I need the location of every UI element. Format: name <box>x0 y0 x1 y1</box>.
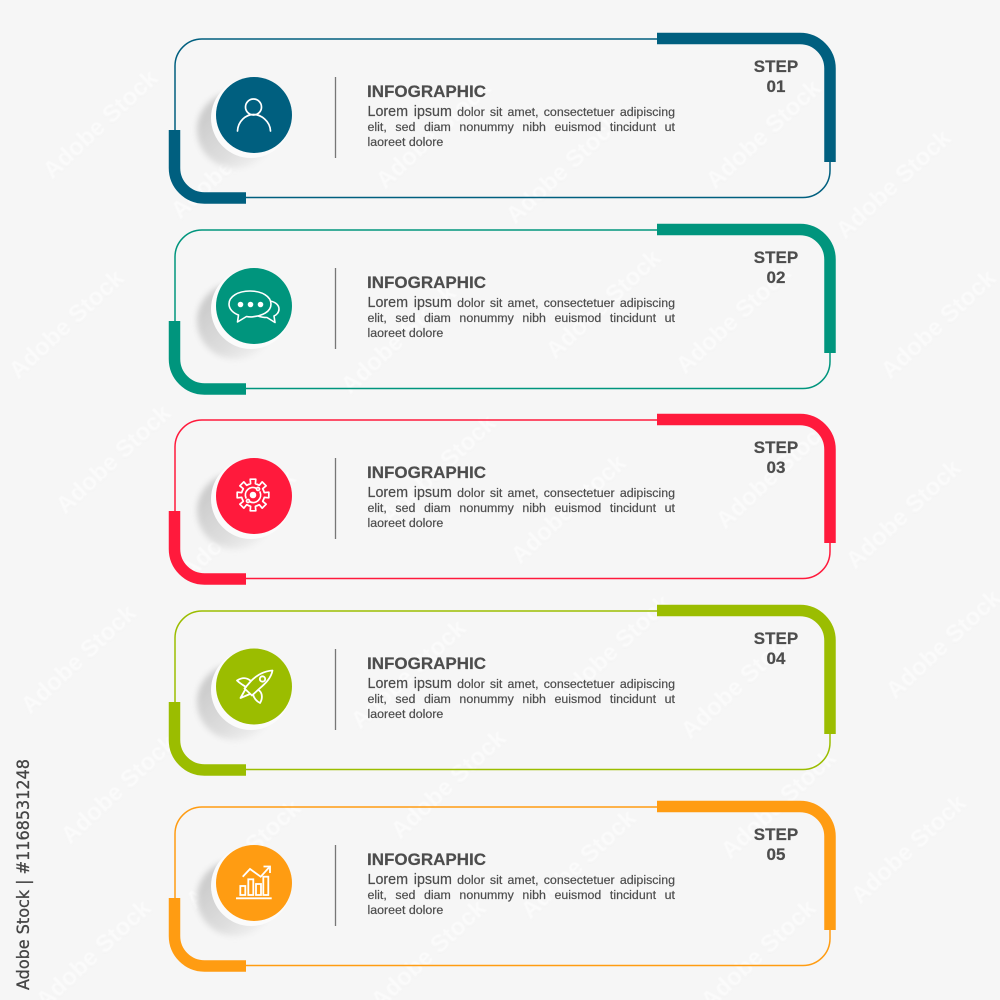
text: Adobe Stock <box>701 74 827 194</box>
text: Adobe Stock <box>181 794 307 914</box>
body text: Lorem ipsum dolor sit amet, consectetuer adipiscing <box>368 676 675 692</box>
body text: Lorem ipsum dolor sit amet, consectetuer adipiscing <box>368 872 675 888</box>
panel: step 03 <box>168 414 836 585</box>
panel: step 01 <box>168 32 836 910</box>
text: Adobe Stock <box>506 449 632 569</box>
text: Adobe Stock <box>376 409 502 529</box>
text: Adobe Stock <box>336 279 462 399</box>
panel: step 05 <box>168 800 836 972</box>
step label <box>754 629 798 668</box>
text: Adobe Stock <box>841 454 967 574</box>
panel: step 04 <box>168 604 836 776</box>
text: Adobe Stock <box>676 624 802 744</box>
step label: 04 <box>767 649 785 668</box>
text: Adobe Stock <box>846 789 972 909</box>
step label: 01 <box>767 77 785 96</box>
body text: elit, sed diam nonummy nibh euismod tincidunt ut <box>368 120 675 134</box>
text: Adobe Stock <box>386 724 512 844</box>
text: Adobe Stock <box>876 264 1000 384</box>
text: Adobe Stock <box>541 244 667 364</box>
body text <box>368 295 675 340</box>
heading: INFOGRAPHIC <box>367 850 486 869</box>
body text: laoreet dolore <box>368 326 443 340</box>
body text: laoreet dolore <box>368 135 443 149</box>
body text: laoreet dolore <box>368 903 443 917</box>
text: Adobe Stock <box>711 414 837 534</box>
body text: elit, sed diam nonummy nibh euismod tincidunt ut <box>368 692 675 706</box>
panel: step 02 <box>168 224 836 395</box>
text: Adobe Stock <box>516 804 642 924</box>
step label <box>754 248 798 287</box>
heading: INFOGRAPHIC <box>367 654 486 673</box>
step label: 05 <box>767 845 785 864</box>
body text: Lorem ipsum dolor sit amet, consectetuer adipiscing <box>368 295 675 311</box>
body text <box>368 485 675 530</box>
body text: laoreet dolore <box>368 707 443 721</box>
body text: elit, sed diam nonummy nibh euismod tincidunt ut <box>368 888 675 902</box>
step label: 03 <box>767 458 785 477</box>
text: Adobe Stock <box>56 729 182 849</box>
frame and icon badge: step 01 <box>168 32 836 204</box>
step label: STEP <box>754 825 798 844</box>
body text: laoreet dolore <box>368 516 443 530</box>
body text <box>368 676 675 721</box>
heading: INFOGRAPHIC <box>367 463 486 482</box>
step label: STEP <box>754 629 798 648</box>
body text <box>368 104 675 149</box>
step label <box>754 825 798 864</box>
frame and icon badge: step 02 <box>168 224 836 395</box>
body text: elit, sed diam nonummy nibh euismod tincidunt ut <box>368 311 675 325</box>
text: Adobe Stock <box>371 74 497 194</box>
step label: STEP <box>754 438 798 457</box>
frame and icon badge: step 03 <box>168 414 836 585</box>
text: Adobe Stock <box>346 614 472 734</box>
text: Adobe Stock <box>166 104 292 224</box>
frame and icon badge: step 04 <box>168 604 836 776</box>
step label: STEP <box>754 57 798 76</box>
heading: INFOGRAPHIC <box>367 273 486 292</box>
body text <box>368 872 675 917</box>
text: Adobe Stock <box>501 109 627 229</box>
text: Adobe Stock <box>51 399 177 519</box>
text: Adobe Stock <box>16 599 142 719</box>
text: Adobe Stock <box>551 589 677 709</box>
text: Adobe Stock <box>4 264 130 384</box>
text: Adobe Stock <box>176 464 302 584</box>
step label <box>754 57 798 96</box>
text: Adobe Stock <box>831 124 957 244</box>
text: Adobe Stock <box>38 64 164 184</box>
heading: INFOGRAPHIC <box>367 82 486 101</box>
text: Adobe Stock <box>671 259 797 379</box>
frame and icon badge: step 05 <box>168 800 836 972</box>
body text: elit, sed diam nonummy nibh euismod tincidunt ut <box>368 501 675 515</box>
text: Adobe Stock <box>716 744 842 864</box>
step label <box>754 438 798 477</box>
step label: STEP <box>754 248 798 267</box>
body text: Lorem ipsum dolor sit amet, consectetuer adipiscing <box>368 104 675 120</box>
step label: 02 <box>767 268 785 287</box>
body text: Lorem ipsum dolor sit amet, consectetuer adipiscing <box>368 485 675 501</box>
